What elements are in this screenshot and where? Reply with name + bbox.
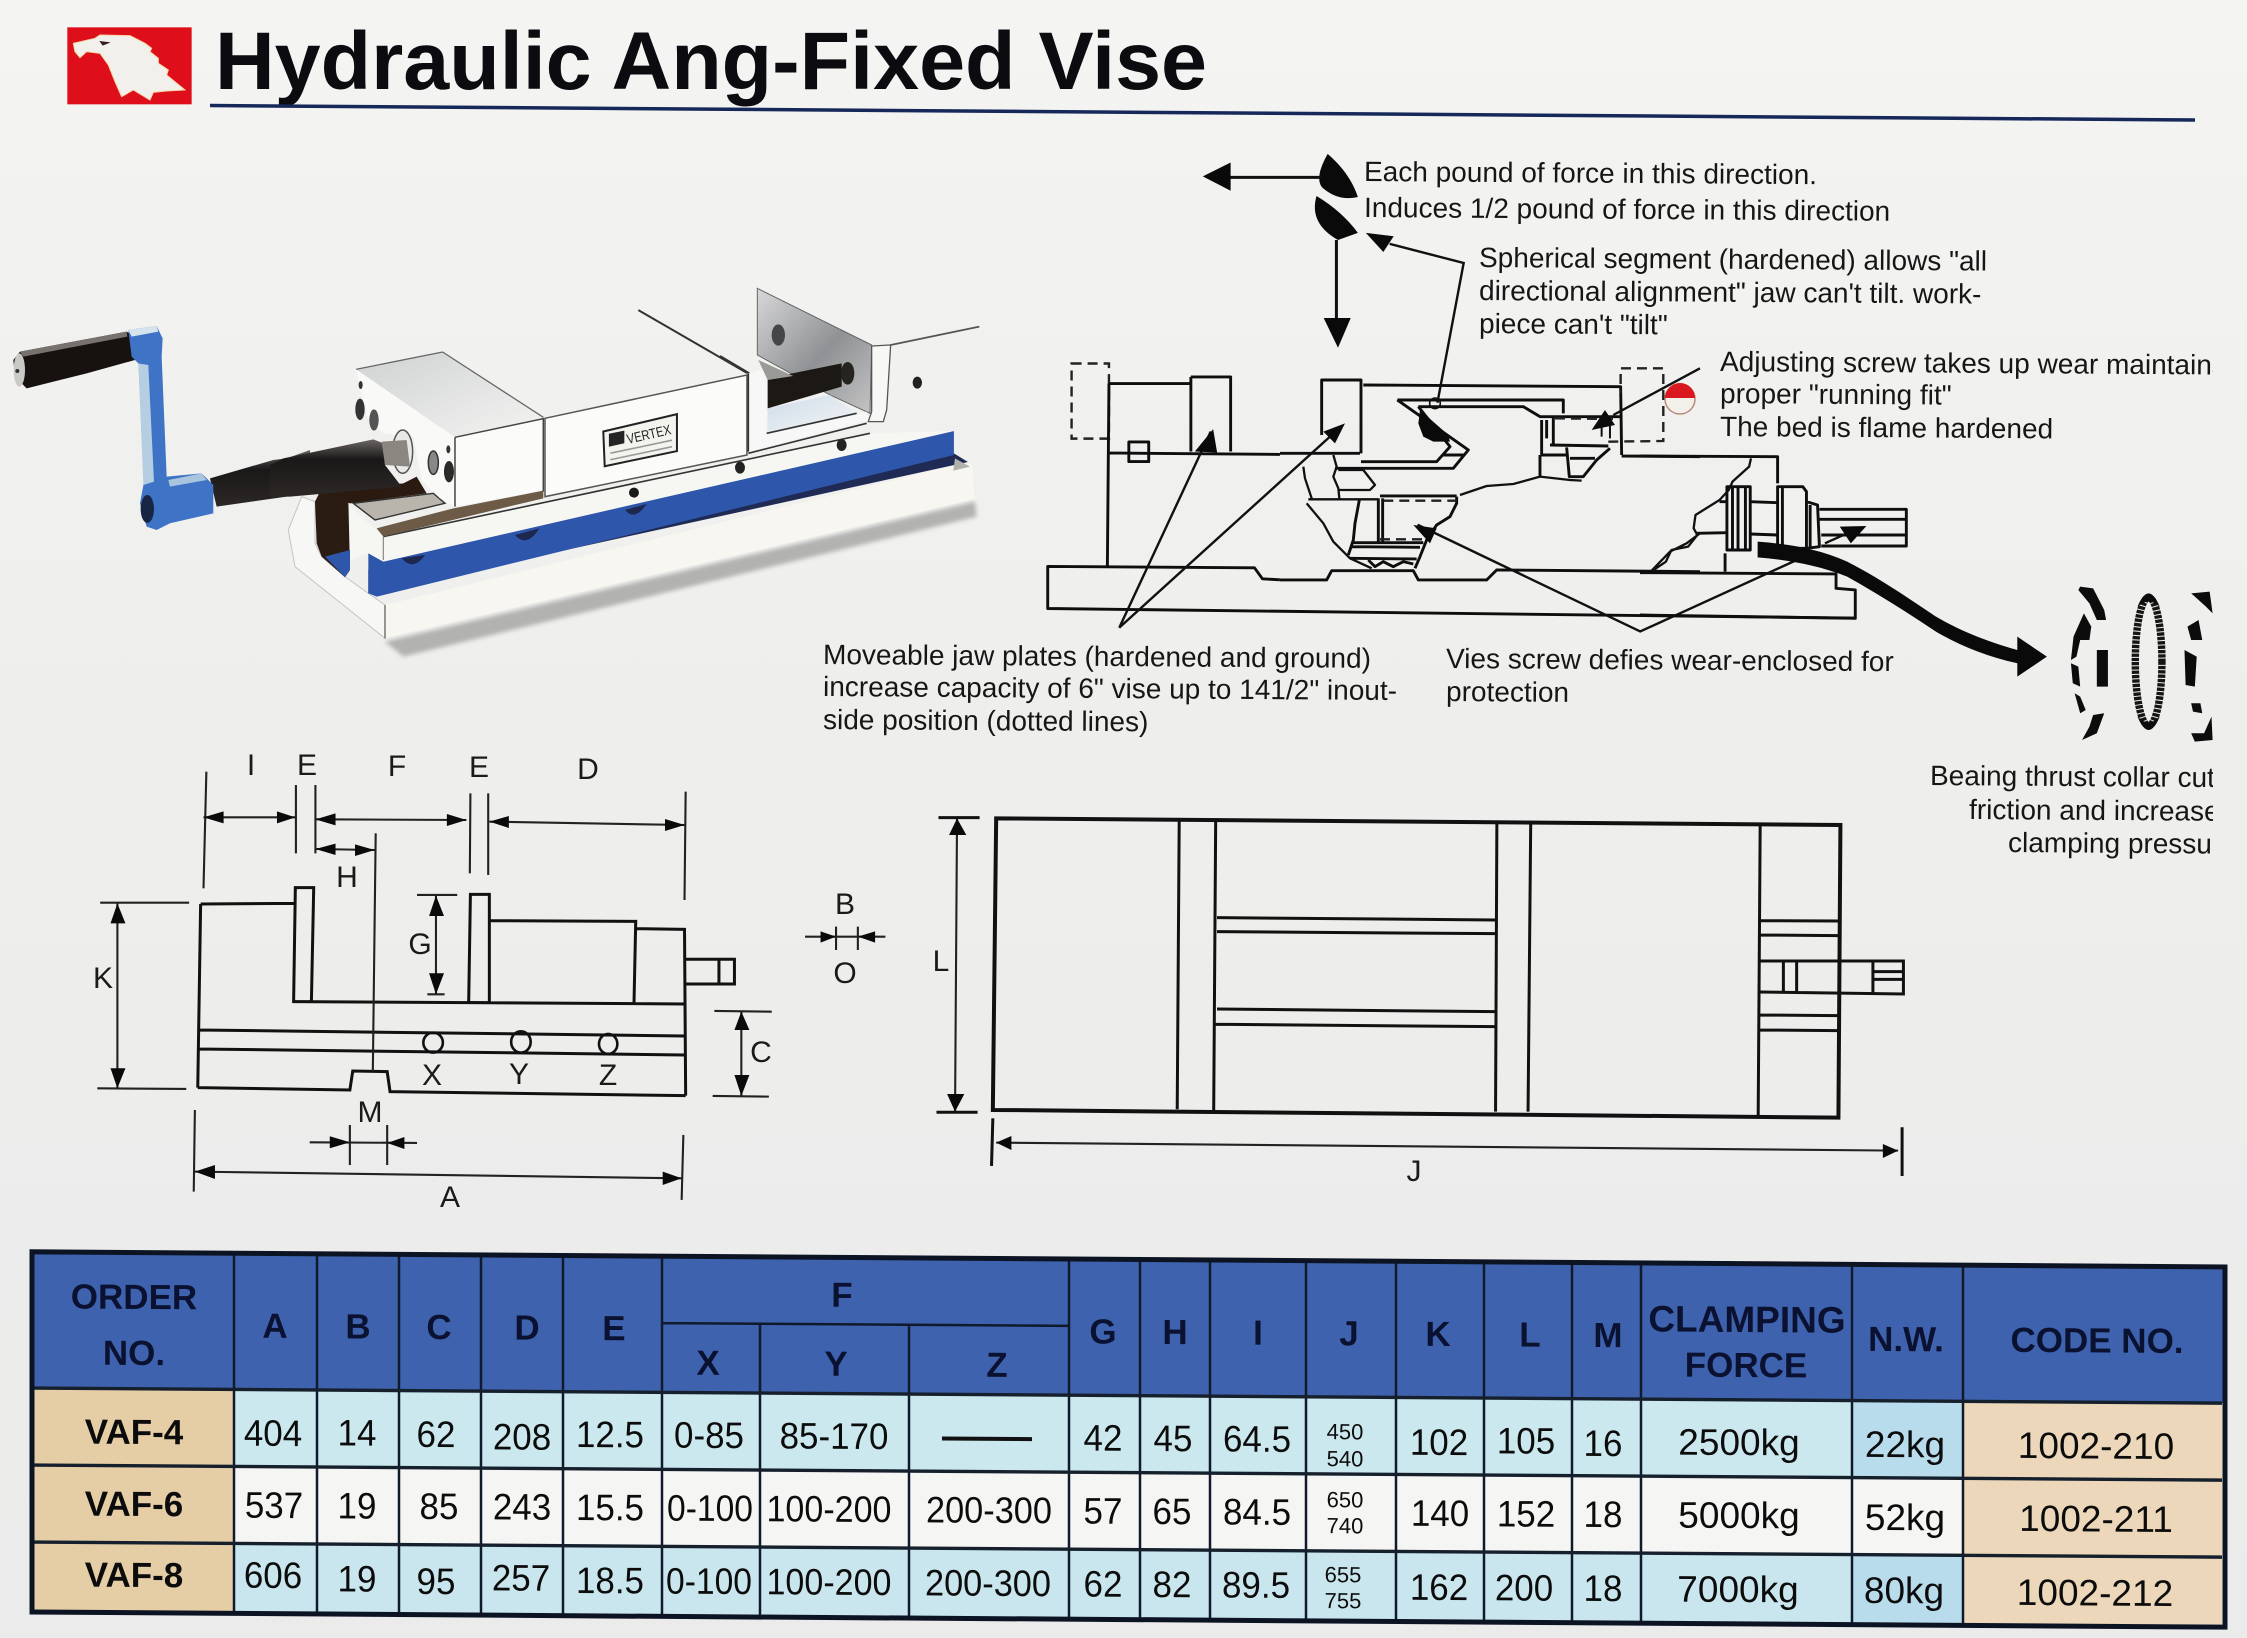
arrow: moveable jaw plates callout bbox=[1119, 426, 1342, 628]
table row: VAF-6: 243 bbox=[493, 1485, 551, 1528]
callout: adjusting screw text: The bed is flame hardened bbox=[1720, 411, 2053, 444]
table row: VAF-4: 22kg bbox=[1865, 1424, 1945, 1465]
table row: VAF-6: 85 bbox=[420, 1485, 458, 1527]
photo sub: moveable jaw and plate bbox=[720, 288, 979, 474]
table row backgrounds bbox=[32, 1388, 2222, 1627]
side view dimension letters: X bbox=[422, 1059, 442, 1092]
callout: adjusting screw text: proper "running fit" bbox=[1720, 378, 1952, 411]
photo sub: bed, jaw block and centre block bbox=[270, 352, 977, 657]
table row: VAF-4: 105 bbox=[1497, 1419, 1555, 1462]
arrowheads: moveable jaw and vise screw bbox=[1323, 423, 1437, 543]
side view dimension letters: E bbox=[469, 751, 489, 784]
table row: VAF-8: 257 bbox=[492, 1556, 550, 1599]
arrow: vise screw callout bbox=[1418, 525, 1795, 631]
table row: VAF-8: 95 bbox=[417, 1560, 455, 1602]
top view dimension lines bbox=[955, 818, 1898, 1151]
table row: VAF-8: 755 bbox=[1325, 1588, 1361, 1613]
table row: VAF-8 bbox=[85, 1553, 2173, 1619]
table header labels: Z bbox=[986, 1346, 1008, 1385]
table header labels: F bbox=[831, 1276, 853, 1315]
callout: vise screw text: protection bbox=[1446, 676, 1569, 708]
icon: half-moon force segments bbox=[1315, 154, 1358, 240]
arrow: spherical segment callout bbox=[1366, 233, 1464, 403]
dimension arrowheads bbox=[111, 811, 875, 1185]
table row: VAF-8: VAF-8 bbox=[85, 1556, 183, 1595]
table row: VAF-4: 16 bbox=[1584, 1422, 1622, 1464]
logo: red square with eagle head bbox=[67, 27, 192, 104]
table header labels: J bbox=[1339, 1314, 1359, 1353]
arrow: horizontal force bbox=[1203, 163, 1322, 191]
ring one bbox=[2071, 587, 2108, 740]
title: Hydraulic Ang-Fixed Vise bbox=[215, 16, 1207, 107]
table row: VAF-8: 82 bbox=[1153, 1563, 1191, 1605]
table row: VAF-4: 14 bbox=[338, 1411, 376, 1454]
table row: VAF-4: 208 bbox=[493, 1415, 551, 1458]
callout: force direction text bbox=[1364, 156, 1890, 227]
table row: VAF-8: 18 bbox=[1584, 1567, 1622, 1609]
callout: force direction text: Induces 1/2 pound of force in this direction bbox=[1364, 192, 1890, 227]
side view dimension letters bbox=[93, 749, 772, 1214]
block bbox=[356, 352, 543, 437]
table row: VAF-4: 102 bbox=[1410, 1421, 1468, 1463]
base bbox=[288, 497, 385, 638]
table header labels: K bbox=[1425, 1315, 1451, 1354]
icon: bearing thrust collar rings bbox=[2071, 587, 2213, 742]
table header labels: A bbox=[262, 1307, 288, 1346]
extension lines bbox=[97, 772, 858, 1200]
title rule bbox=[210, 106, 2195, 120]
table header labels: G bbox=[1089, 1313, 1117, 1352]
dimension lines bbox=[117, 817, 885, 1178]
section: dashed jaw position bbox=[1072, 364, 1109, 439]
table row: VAF-6: 1002-211 bbox=[2019, 1498, 2173, 1540]
table row: VAF-6: 200-300 bbox=[926, 1489, 1052, 1531]
table grid bbox=[234, 1254, 1963, 1626]
side view holes bbox=[423, 1031, 617, 1054]
table row: VAF-8: 200 bbox=[1495, 1566, 1553, 1609]
table row: VAF-4: 64.5 bbox=[1223, 1418, 1291, 1460]
table row: VAF-4: 42 bbox=[1084, 1417, 1122, 1459]
callout: spherical segment text: Spherical segment (hardened) allows "all bbox=[1479, 242, 1987, 277]
table row: VAF-6: 65 bbox=[1153, 1490, 1191, 1532]
side view outline bbox=[198, 888, 734, 1096]
side view dimension letters: C bbox=[750, 1036, 772, 1069]
section: centre jaw, spherical seat and screw bbox=[1280, 368, 1700, 580]
top view jaw and rail lines bbox=[1177, 820, 1838, 1116]
table row: VAF-6: 140 bbox=[1411, 1492, 1469, 1534]
table row: VAF-6: 52kg bbox=[1865, 1497, 1945, 1538]
table header background bbox=[32, 1252, 2225, 1403]
table header labels: H bbox=[1162, 1313, 1188, 1352]
table header labels: C bbox=[426, 1308, 452, 1347]
side view dimension letters: Y bbox=[509, 1058, 529, 1091]
callout: moveable jaw plates text: increase capacity of 6" vise up to 141/2" inout- bbox=[823, 671, 1397, 706]
table row: VAF-8: 62 bbox=[1084, 1563, 1122, 1605]
table row: VAF-8: 89.5 bbox=[1222, 1564, 1290, 1606]
photo: hydraulic vise with crank handle bbox=[13, 288, 979, 657]
table row: VAF-8: 100-200 bbox=[766, 1561, 891, 1603]
photo sub: centre top edge and nameplate bbox=[603, 310, 747, 466]
table row: VAF-4: 540 bbox=[1327, 1446, 1363, 1471]
side view dimension letters: H bbox=[336, 861, 358, 894]
table row: VAF-4: 2500kg bbox=[1678, 1422, 1800, 1463]
table row: VAF-6 bbox=[85, 1479, 2173, 1544]
step bbox=[353, 493, 445, 520]
diagram: cross-section of vise bbox=[1048, 154, 2047, 677]
callout: vise screw text: Vies screw defies wear-enclosed for bbox=[1446, 643, 1894, 677]
strip bbox=[346, 431, 954, 562]
table row: VAF-6: 5000kg bbox=[1678, 1495, 1800, 1536]
table header labels: B bbox=[345, 1307, 371, 1347]
table row: VAF-6: 18 bbox=[1584, 1493, 1622, 1535]
callout: moveable jaw plates text bbox=[823, 639, 1397, 737]
side view dimension letters: E bbox=[297, 749, 317, 782]
table row: VAF-6: 650 bbox=[1327, 1487, 1363, 1512]
table row: VAF-6: 537 bbox=[245, 1484, 303, 1526]
table row: VAF-4: 404 bbox=[244, 1412, 302, 1454]
callout: moveable jaw plates text: Moveable jaw plates (hardened and ground) bbox=[823, 639, 1371, 674]
table header labels: N.W. bbox=[1868, 1320, 1944, 1359]
section: torn edges bbox=[1303, 455, 1582, 568]
table header labels: I bbox=[1253, 1314, 1263, 1353]
ring three bbox=[2184, 592, 2213, 742]
table row: VAF-4: 450 bbox=[1327, 1419, 1363, 1444]
table row: VAF-4: 12.5 bbox=[576, 1413, 644, 1456]
diagram: top view with dimensions bbox=[933, 818, 1903, 1188]
table row: VAF-6: 57 bbox=[1084, 1490, 1122, 1532]
table row: VAF-4: VAF-4 bbox=[85, 1413, 184, 1452]
table header labels: Y bbox=[824, 1345, 848, 1384]
section: small key bbox=[1129, 442, 1149, 462]
section: bearings, shaft and base right bbox=[1640, 456, 2047, 677]
table header labels bbox=[71, 1270, 2184, 1393]
table row: VAF-4: 1002-210 bbox=[2018, 1425, 2174, 1467]
table header labels: FORCE bbox=[1685, 1346, 1807, 1385]
callout: adjusting screw text: Adjusting screw takes up wear maintains bbox=[1720, 346, 2226, 381]
channel bbox=[315, 492, 350, 577]
table header labels: D bbox=[514, 1309, 540, 1348]
table row: VAF-8: 606 bbox=[244, 1554, 302, 1596]
table row: VAF-6: 100-200 bbox=[766, 1488, 891, 1530]
photo sub: crank handle bbox=[13, 326, 310, 530]
callout: thrust collar text: friction and increases bbox=[1969, 794, 2234, 827]
table header labels: ORDER bbox=[71, 1277, 197, 1317]
table row: VAF-6: 19 bbox=[338, 1484, 376, 1527]
section: left body and jaw bbox=[1048, 377, 1855, 618]
table row: VAF-4: 62 bbox=[417, 1413, 455, 1455]
table row: VAF-4: 0-85 bbox=[674, 1414, 744, 1456]
holes bbox=[402, 504, 647, 564]
table header labels: X bbox=[696, 1344, 720, 1383]
side view dimension letters: M bbox=[358, 1096, 382, 1129]
table row: VAF-8: 655 bbox=[1325, 1562, 1361, 1587]
table row: VAF-8: 19 bbox=[338, 1557, 376, 1600]
table row: VAF-6: 0-100 bbox=[667, 1488, 753, 1529]
arrow: thick arrow to thrust collar bbox=[1758, 542, 2047, 677]
top view outline bbox=[993, 818, 1840, 1118]
callout: thrust collar text: Beaing thrust collar cuts bbox=[1930, 760, 2229, 793]
side view dimension letters: F bbox=[388, 750, 406, 783]
arrow: adjusting screw callout bbox=[1592, 368, 1700, 438]
arrow: thrust collar pointer bbox=[1825, 526, 1866, 543]
side view dimension letters: G bbox=[408, 928, 432, 961]
side view dimension letters: I bbox=[247, 749, 255, 782]
table row: VAF-6: VAF-6 bbox=[85, 1485, 183, 1524]
table row: VAF-6: 84.5 bbox=[1223, 1491, 1291, 1533]
top view arrowheads bbox=[947, 818, 1898, 1158]
callout: spherical segment text bbox=[1479, 242, 1987, 340]
table header labels: L bbox=[1519, 1315, 1541, 1355]
bolts on block bbox=[393, 430, 413, 473]
table header labels: NO. bbox=[103, 1334, 165, 1373]
arrow: vertical force bbox=[1324, 240, 1351, 348]
side view dimension letters: Z bbox=[599, 1059, 617, 1092]
table row: VAF-4 bbox=[85, 1410, 2174, 1477]
top view letter J: J bbox=[1406, 1155, 1422, 1188]
callout: spherical segment text: directional alignment" jaw can't tilt. work- bbox=[1479, 275, 1982, 310]
table row: VAF-6: 740 bbox=[1327, 1513, 1363, 1538]
nameplate text: VERTEX bbox=[625, 421, 673, 447]
table row: VAF-8: 200-300 bbox=[925, 1562, 1051, 1604]
dimension B and O symbol labels: B bbox=[835, 888, 855, 921]
table row: VAF-8: 162 bbox=[1410, 1566, 1468, 1608]
table row: VAF-6: 15.5 bbox=[576, 1486, 644, 1529]
table row: VAF-8: 18.5 bbox=[576, 1559, 644, 1602]
callout: thrust collar text bbox=[1932, 765, 2213, 859]
shaft bbox=[320, 477, 427, 503]
ring two bbox=[2135, 593, 2162, 730]
icon: red and white flame-hardened marker bbox=[1665, 383, 1695, 414]
side view dimension letters: D bbox=[577, 753, 599, 786]
callout: vise screw text bbox=[1446, 643, 1894, 708]
diagram: side view with dimensions bbox=[93, 749, 885, 1214]
table header labels: CODE NO. bbox=[2010, 1321, 2184, 1361]
callout: moveable jaw plates text: side position (dotted lines) bbox=[823, 704, 1148, 737]
table row: VAF-8: 7000kg bbox=[1677, 1569, 1799, 1610]
callout: adjusting screw text bbox=[1720, 350, 2213, 439]
table row: VAF-8: 80kg bbox=[1864, 1570, 1944, 1611]
callout: force direction text: Each pound of force in this direction. bbox=[1364, 156, 1817, 190]
table row: VAF-8: 1002-212 bbox=[2017, 1572, 2173, 1614]
table row: VAF-4: 85-170 bbox=[780, 1414, 888, 1457]
table row: VAF-4: 45 bbox=[1154, 1417, 1192, 1459]
table header labels: CLAMPING bbox=[1648, 1298, 1846, 1341]
dimension B and O symbol labels bbox=[833, 888, 857, 990]
top view letter L: L bbox=[933, 945, 949, 978]
table header labels: E bbox=[602, 1309, 626, 1348]
dimension B and O symbol labels: O bbox=[833, 957, 857, 990]
icon: spherical segment bbox=[1418, 410, 1450, 442]
callout: thrust collar text: clamping pressure bbox=[2008, 827, 2237, 860]
top view shaft bbox=[1760, 961, 1903, 994]
specification table bbox=[32, 1252, 2225, 1627]
table row: VAF-6: 152 bbox=[1497, 1492, 1555, 1535]
side view dimension letters: A bbox=[440, 1181, 460, 1214]
side view dimension letters: K bbox=[93, 962, 113, 995]
table row: VAF-8: 0-100 bbox=[666, 1561, 752, 1602]
callout: spherical segment text: piece can't "tilt" bbox=[1479, 308, 1668, 340]
table header labels: M bbox=[1593, 1316, 1623, 1355]
section: base line bbox=[1280, 570, 1700, 580]
